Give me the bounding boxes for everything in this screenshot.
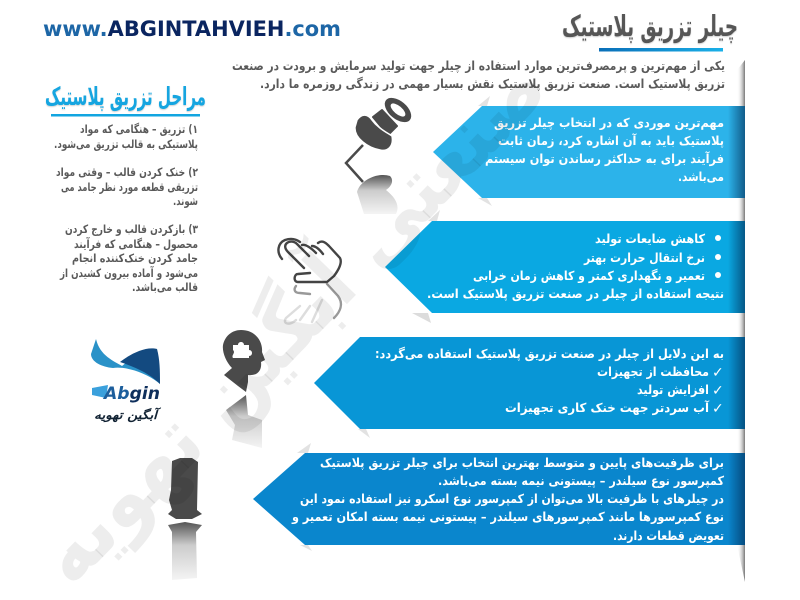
panel 3: reasons: محافظت از تجهیزات xyxy=(597,364,709,379)
logo wordmark: Abgin xyxy=(102,384,160,404)
panel 3: reasons: به این دلایل از چیلر در صنعت تزریق پلاستیک استفاده می‌گردد: xyxy=(375,346,724,361)
panel 2: benefits: نرخ انتقال حرارت بهتر xyxy=(583,250,705,265)
panel 3: reasons: ✓ xyxy=(712,383,724,399)
panel 2: benefits: کاهش ضایعات تولید xyxy=(595,231,706,246)
sidebar steps: پلاستیکی به قالب تزریق می‌شود. xyxy=(54,137,198,152)
website url: www.ABGINTAHVIEH.com xyxy=(43,17,341,41)
panel 1: tuning importance: مهم‌ترین موردی که در انتخاب چیلر تزریق xyxy=(494,115,724,130)
panel 2: benefits: نتیجه استفاده از چیلر در صنعت تزریق پلاستیک است. xyxy=(427,286,724,301)
panel 4: compressors: برای ظرفیت‌های پایین و متوسط بهترین انتخاب برای چیلر تزریق پلاستیک xyxy=(320,455,724,470)
panel 1: tuning importance: پلاستیک باید به آن اشاره کرد، زمان ثابت xyxy=(498,133,724,148)
right edge shadow xyxy=(737,60,745,582)
logo flame xyxy=(92,385,108,398)
sidebar steps: شوند. xyxy=(173,194,198,209)
icon: compressor xyxy=(168,458,202,580)
bullets xyxy=(715,235,721,278)
sidebar steps: ۳) بازکردن قالب و خارج کردن xyxy=(65,222,198,237)
panel 2: benefits: تعمیر و نگهداری کمتر و کاهش زمان خرابی xyxy=(473,268,705,283)
intro paragraph xyxy=(232,58,725,91)
sidebar steps: جامد کردن خنک‌کننده انجام xyxy=(72,251,198,265)
panel 3: reasons xyxy=(314,337,745,438)
sidebar steps xyxy=(54,122,198,294)
logo: Abgin xyxy=(91,339,161,423)
sidebar steps: قالب می‌باشد. xyxy=(132,280,198,294)
icon: pointing hand xyxy=(278,239,341,324)
icon: head with puzzle piece xyxy=(223,330,265,448)
panel 4: compressors xyxy=(253,443,745,551)
sidebar underline xyxy=(51,114,200,116)
sidebar steps: تزریقی قطعه مورد نظر جامد می xyxy=(61,180,198,195)
sidebar heading: مراحل تزریق پلاستیک xyxy=(45,82,206,112)
panel 4: compressors: نوع کمپرسورها مانند کمپرسورهای سیلندر – پیستونی نیمه بسته امکان تعمیر و xyxy=(291,509,724,524)
intro paragraph: تزریق پلاستیک است. صنعت تزریق پلاستیک نقش بسیار مهمی در زندگی روزمره ما دارد. xyxy=(260,76,725,91)
head reflection xyxy=(226,395,262,448)
panel 1: tuning importance xyxy=(433,96,745,206)
sidebar steps: ۲) خنک کردن قالب – وقتی مواد xyxy=(56,165,198,180)
compressor reflection xyxy=(168,522,202,580)
pushpin reflection xyxy=(357,175,398,214)
panel 3: reasons: افزایش تولید xyxy=(637,382,709,397)
hand reflection xyxy=(295,284,341,318)
panel 3: reasons: آب سردتر جهت خنک کاری تجهیزات xyxy=(505,400,710,415)
panel 2: benefits xyxy=(385,210,745,323)
title underline xyxy=(599,48,723,52)
panel 1: tuning importance: فرآیند برای به حداکثر رساندن توان سیستم xyxy=(485,151,724,166)
sidebar steps: محصول – هنگامی که فرآیند xyxy=(74,237,198,252)
panel 3: reasons: ✓ xyxy=(712,365,724,381)
panel 4: compressors: تعویض قطعات دارند. xyxy=(613,528,724,543)
intro paragraph: یکی از مهم‌ترین و پرمصرف‌ترین موارد استفاده از چیلر جهت تولید سرمایش و برودت در صنعت xyxy=(232,58,725,73)
panel 1: tuning importance: می‌باشد. xyxy=(678,169,724,184)
icon: pushpin xyxy=(346,92,416,214)
panel 4: compressors: در چیلرهای با ظرفیت بالا می‌توان از کمپرسور نوع اسکرو نیز استفاده نمود این xyxy=(300,491,724,506)
panel 4: compressors: کمپرسور نوع سیلندر – پیستونی نیمه بسته می‌باشد. xyxy=(438,473,725,488)
sidebar steps: می‌شود و آماده بیرون کشیدن از xyxy=(59,266,198,281)
logo caption: آبگین تهویه xyxy=(94,407,161,423)
panel 3: reasons: ✓ xyxy=(712,401,724,417)
sidebar steps: ۱) تزریق – هنگامی که مواد xyxy=(80,122,198,137)
